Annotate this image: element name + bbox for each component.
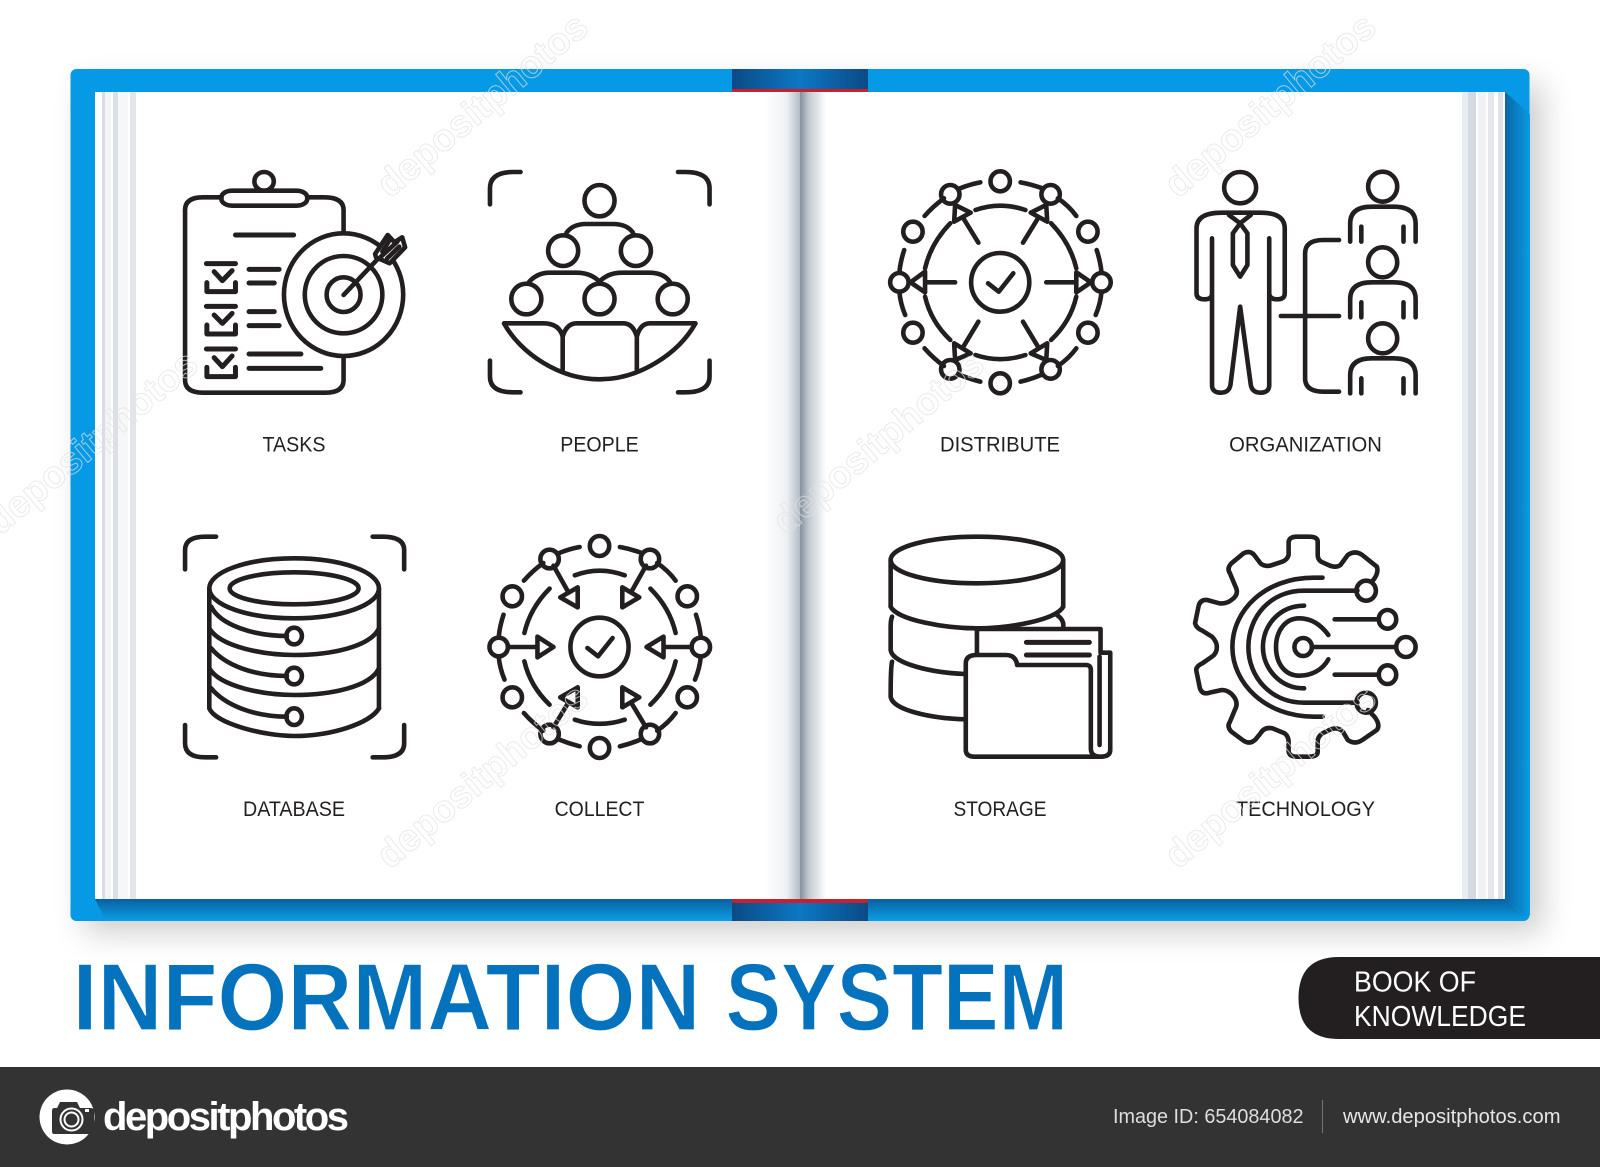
icon: distribute network: [890, 171, 1111, 393]
footer divider: [1322, 1100, 1323, 1133]
item: distribute: [890, 171, 1111, 456]
icon: people group: [490, 172, 710, 392]
book cover: [70, 69, 1530, 921]
icon: clipboard with target: [185, 172, 405, 393]
icon: storage with folder: [891, 537, 1110, 757]
label: storage: STORAGE: [954, 798, 1046, 821]
badge: book of knowledge: KNOWLEDGE: [1354, 1001, 1526, 1033]
cover right band: [1505, 92, 1530, 917]
watermarks: depositphotos: [1157, 5, 1384, 206]
label: tasks: TASKS: [262, 434, 326, 456]
spine red band top: [732, 89, 868, 92]
pages: [95, 92, 1505, 899]
label: distribute: DISTRIBUTE: [940, 434, 1060, 456]
logo wordmark: depositphotos: [103, 1095, 349, 1139]
watermarks: [0, 5, 1384, 877]
image id: Image ID: 654084082: [1113, 1106, 1304, 1128]
watermarks: depositphotos: [1157, 676, 1384, 877]
website url: www.depositphotos.com: [1342, 1106, 1560, 1128]
item: people: [490, 172, 710, 456]
right page edges: [1462, 92, 1503, 899]
label: database: DATABASE: [243, 798, 345, 821]
title: INFORMATION: [72, 945, 700, 1051]
icon: organization chart: [1197, 172, 1416, 393]
label: organization: ORGANIZATION: [1229, 434, 1382, 456]
watermarks: depositphotos: [369, 676, 596, 877]
spine bottom: [732, 899, 868, 921]
icon: collect network: [489, 536, 710, 758]
spine top: [732, 69, 868, 92]
title: [72, 945, 1068, 1051]
left page edges: [102, 92, 136, 899]
footer bar: [0, 1067, 1600, 1167]
spine red band bottom: [732, 899, 868, 903]
label: collect: COLLECT: [555, 798, 645, 821]
book shadow: [84, 84, 1542, 932]
badge: book of knowledge: BOOK OF: [1354, 966, 1476, 998]
item: organization: [1197, 172, 1416, 456]
icon: database: [185, 537, 404, 757]
watermarks: depositphotos: [765, 342, 992, 543]
item: storage: [891, 537, 1110, 821]
watermarks: depositphotos: [369, 5, 596, 206]
item: tasks: [185, 172, 405, 456]
icon: depositphotos logo: [40, 1090, 94, 1144]
label: technology: TECHNOLOGY: [1236, 798, 1375, 821]
book: [70, 69, 1542, 932]
centre fold left: [765, 92, 801, 899]
title: SYSTEM: [726, 945, 1068, 1051]
cover bottom band: [95, 899, 1525, 921]
badge: book of knowledge: [1298, 957, 1600, 1039]
item: technology: [1195, 537, 1416, 821]
centre fold right: [800, 92, 826, 899]
item: database: [185, 537, 404, 821]
icon: gear technology: [1195, 537, 1416, 757]
item: collect: [489, 536, 710, 821]
label: people: PEOPLE: [560, 434, 639, 456]
